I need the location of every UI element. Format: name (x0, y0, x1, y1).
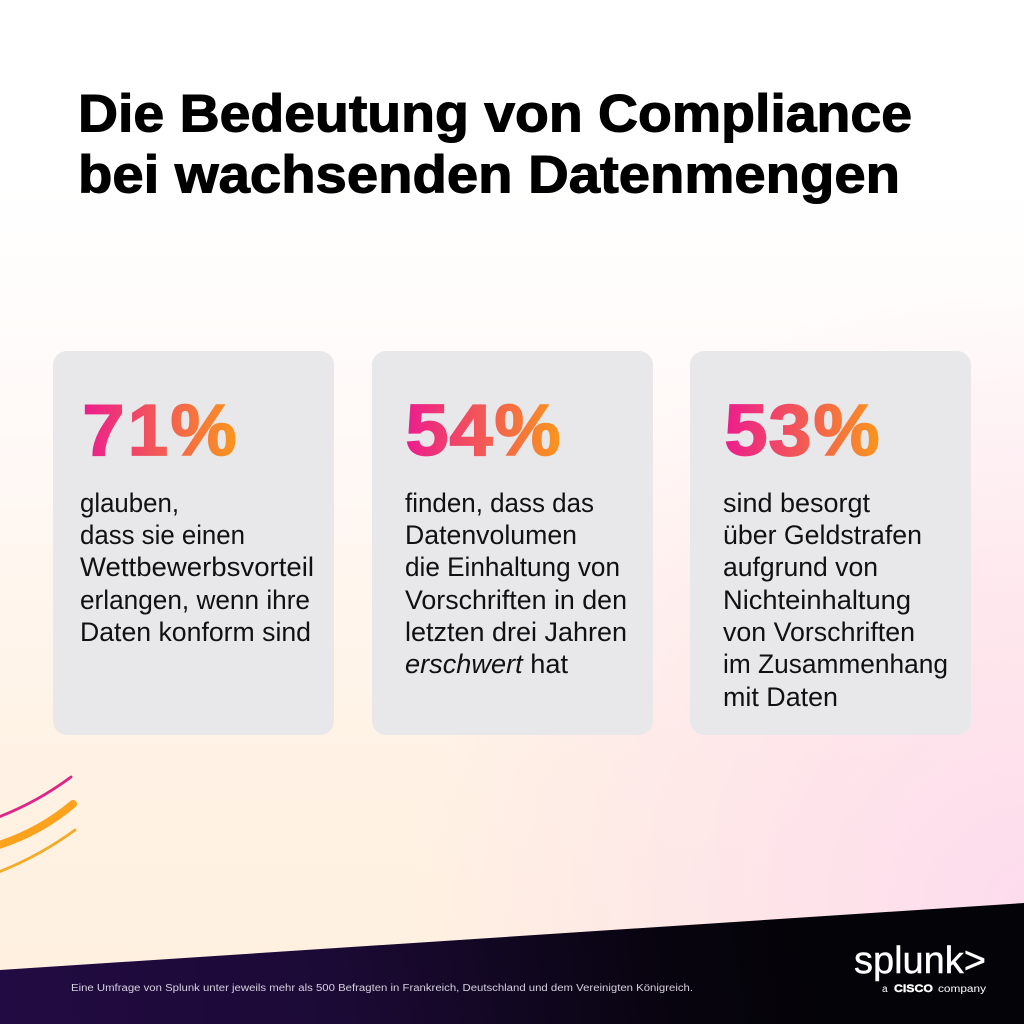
title (78, 84, 912, 204)
statistic: 53% (724, 391, 880, 471)
description: fines: im Zusammenhang (723, 649, 948, 679)
description: fines: aufgrund von (723, 552, 878, 582)
logo: splunk, a Cisco company: company (938, 984, 986, 995)
description: data volume: finden, dass das (405, 488, 594, 518)
statistic: 53%: 5 (724, 391, 768, 471)
dark footer band (0, 903, 1024, 1024)
logo: splunk, a Cisco company: CISCO (894, 983, 933, 995)
statistic: 71% (82, 391, 236, 471)
description: data volume: Vorschriften in den (405, 585, 627, 615)
description: competitive advantage: dass sie einen (80, 520, 245, 550)
statistic: 54% (406, 391, 560, 471)
description: competitive advantage: Wettbewerbsvorteil (80, 552, 314, 582)
panel: 54 percent (372, 351, 653, 735)
footnote: Eine Umfrage von Splunk unter jeweils mehr als 500 Befragten in Frankreich, Deutschland und dem Vereinigten Königreich. (71, 983, 693, 994)
title: Die Bedeutung von Compliance (78, 84, 912, 144)
description: data volume (405, 488, 627, 679)
logo: splunk, a Cisco company: splunk> (854, 940, 986, 982)
description: competitive advantage (80, 488, 314, 647)
description: fines: von Vorschriften (723, 617, 915, 647)
statistic: 71%: 7 (82, 391, 124, 471)
title: bei wachsenden Datenmengen (78, 146, 900, 204)
statistic: 53%: % (814, 391, 880, 471)
logo: splunk, a Cisco company: a (882, 984, 888, 995)
statistic: 54%: % (494, 391, 560, 471)
statistic: 71%: % (170, 391, 236, 471)
description: fines: sind besorgt (723, 488, 871, 518)
description: data volume: erschwert hat (405, 649, 569, 679)
description: data volume: die Einhaltung von (405, 552, 620, 582)
statistic: 53%: 3 (768, 391, 812, 471)
description: fines: mit Daten (723, 682, 838, 712)
description: competitive advantage: Daten konform sind (80, 617, 311, 647)
description: fines: Nichteinhaltung (723, 585, 911, 615)
description: competitive advantage: erlangen, wenn ihre (80, 585, 310, 615)
statistic: 54%: 5 (406, 391, 448, 471)
panel: 71 percent (53, 351, 334, 735)
description: data volume: Datenvolumen (405, 520, 577, 550)
description: fines (723, 488, 948, 712)
decorative swooshes (0, 777, 75, 873)
statistic: 71%: 1 (128, 391, 168, 471)
description: competitive advantage: glauben, (80, 488, 179, 518)
description: fines: über Geldstrafen (723, 520, 922, 550)
statistic: 54%: 4 (450, 391, 492, 471)
panel: 53 percent (690, 351, 971, 735)
description: data volume: letzten drei Jahren (405, 617, 627, 647)
